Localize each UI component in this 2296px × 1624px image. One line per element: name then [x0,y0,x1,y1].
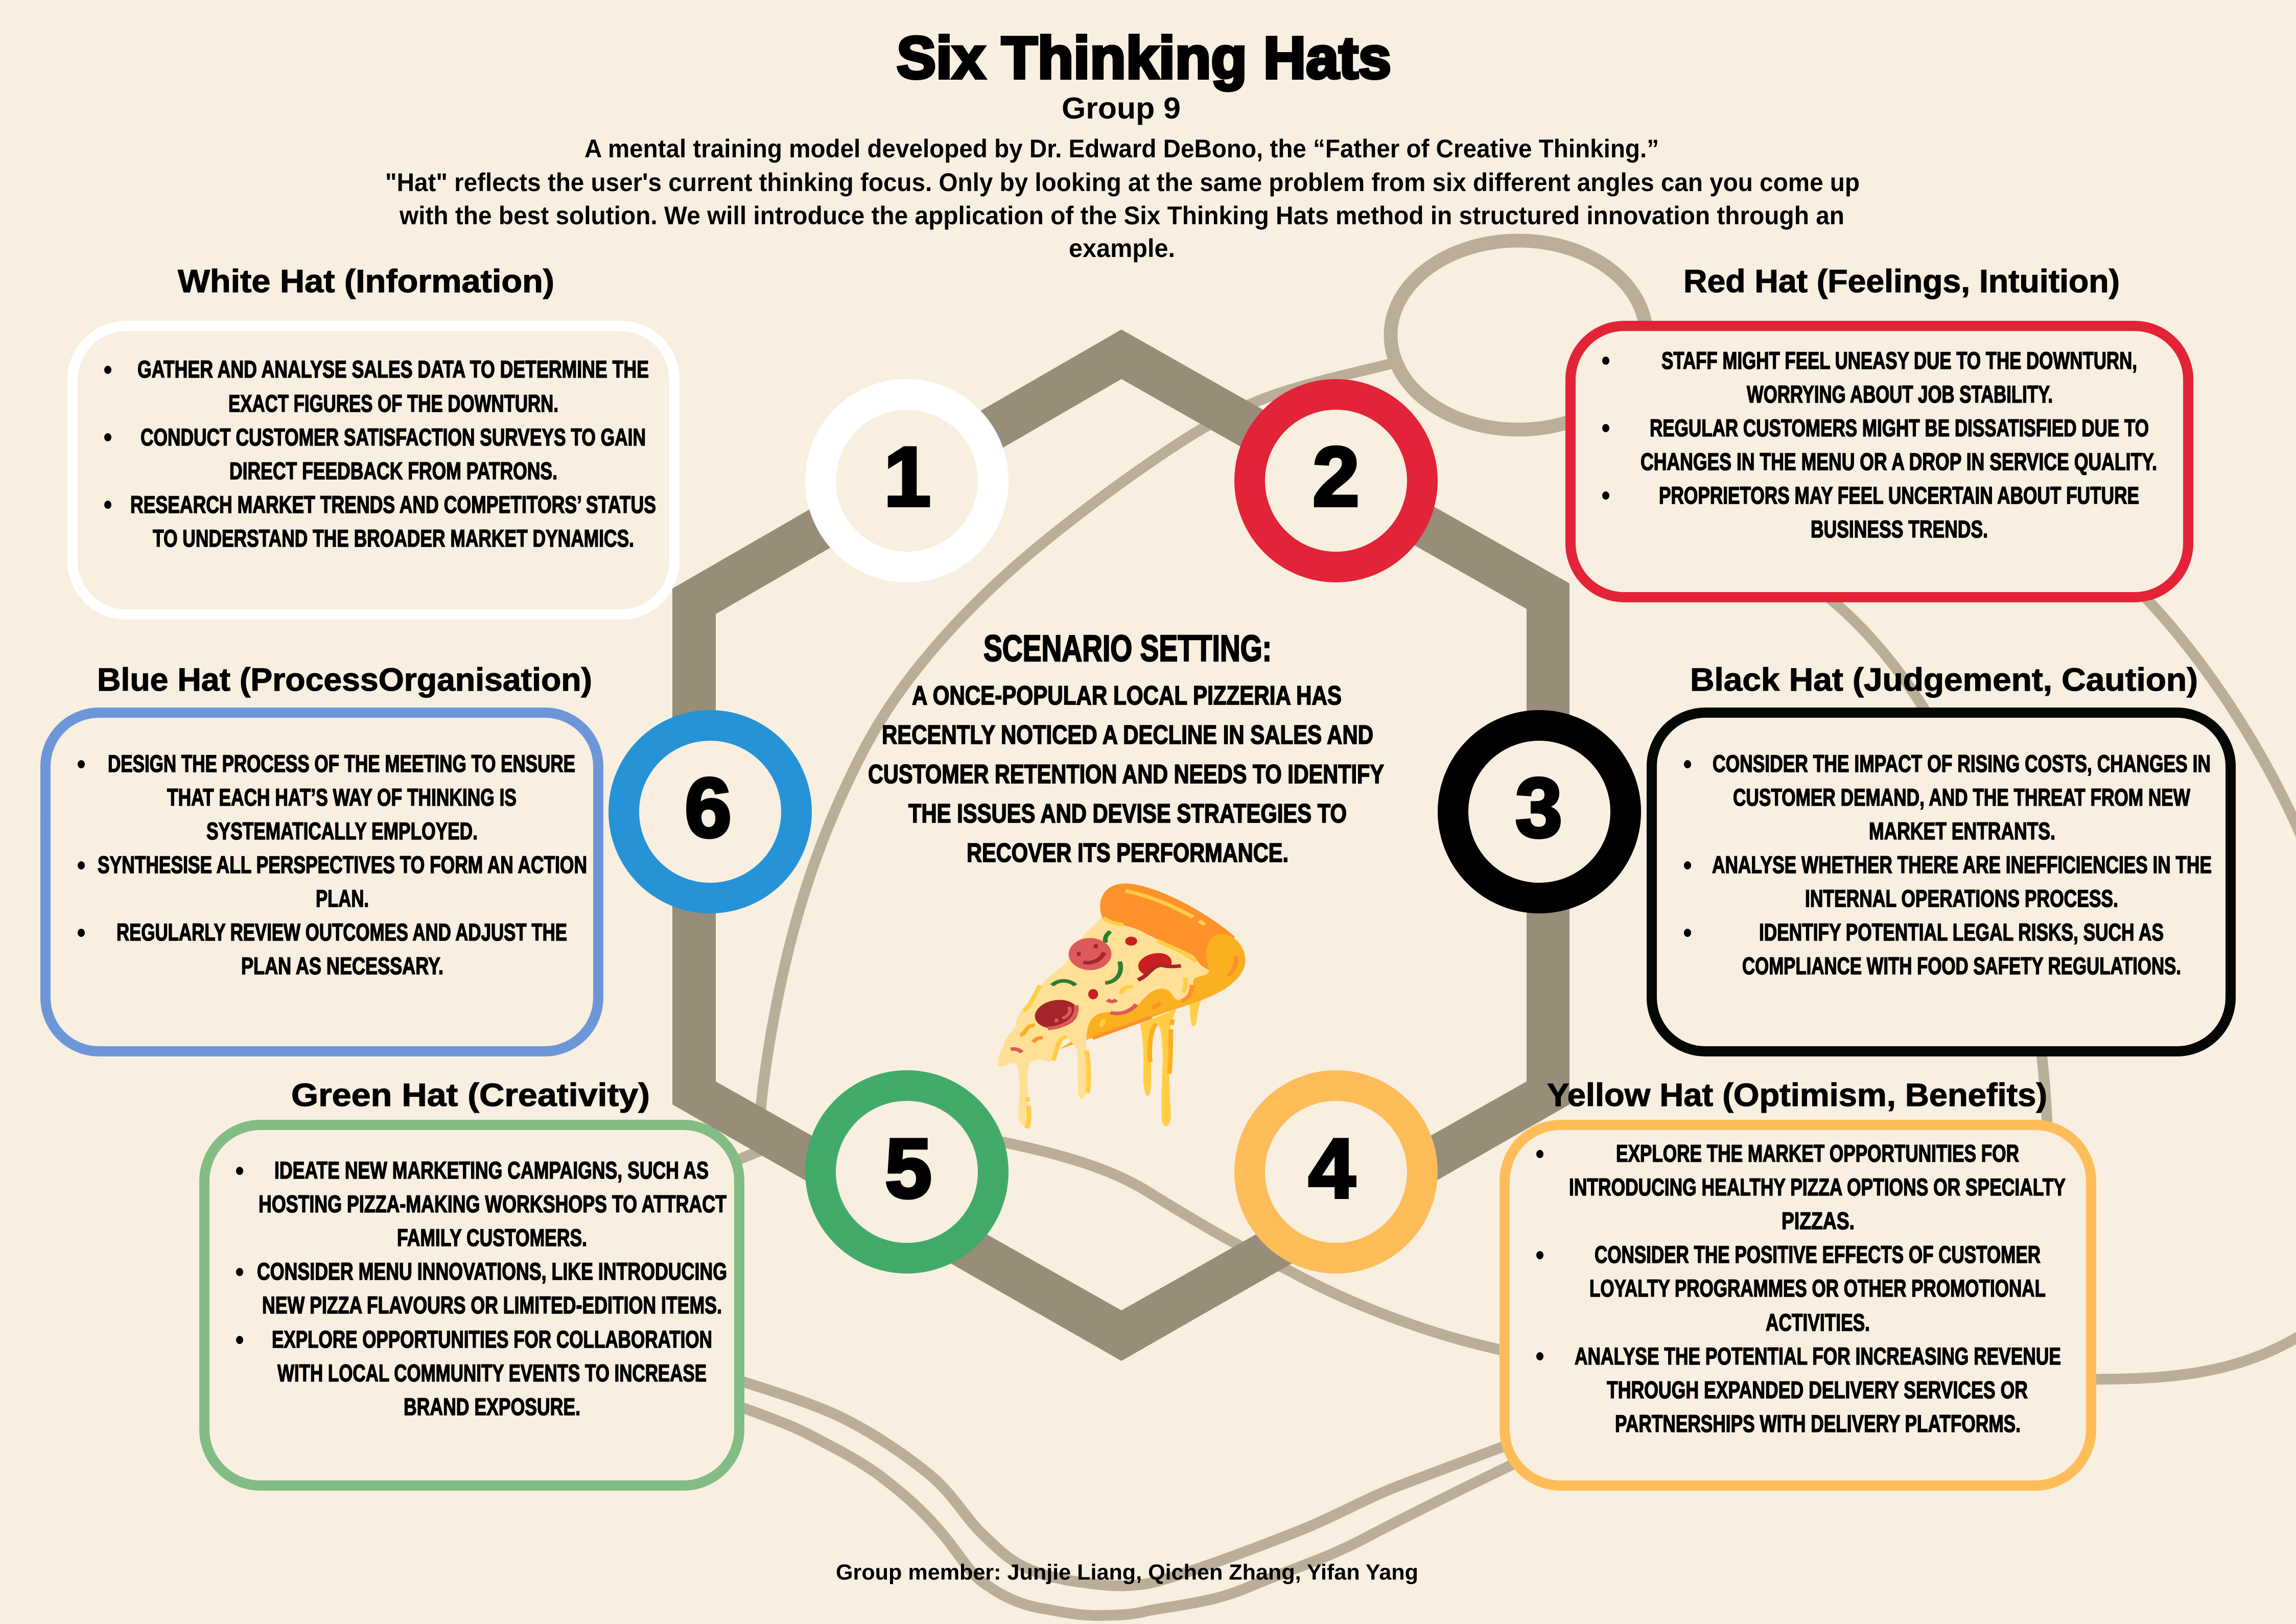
text: blue hat points: REGULARLY REVIEW OUTCOMES AND ADJUST THE [116,919,567,946]
text: yellow hat points: PIZZAS. [1782,1207,1855,1234]
number ring 1 [821,394,993,567]
text: blue hat points: SYSTEMATICALLY EMPLOYED. [206,817,478,844]
panel: yellow hat [1505,1077,2091,1486]
number ring 4 [1250,1086,1422,1258]
intro text: "Hat" reflects the user's current thinking focus. Only by looking at the same problem from six different angles can you come up [385,168,1860,197]
text: black hat points: IDENTIFY POTENTIAL LEGAL RISKS, SUCH AS [1759,919,2164,946]
text: blue hat points: SYNTHESISE ALL PERSPECTIVES TO FORM AN ACTION [98,851,587,878]
scenario text block: SCENARIO SETTING: [983,628,1272,669]
text: white hat points: CONDUCT CUSTOMER SATISFACTION SURVEYS TO GAIN [140,423,646,451]
text: black hat points: INTERNAL OPERATIONS PROCESS. [1805,885,2118,912]
heading: blue hat: Blue Hat (ProcessOrganisation) [97,662,592,698]
text: blue hat points: DESIGN THE PROCESS OF THE MEETING TO ENSURE [108,750,575,777]
text: blue hat points: THAT EACH HAT’S WAY OF THINKING IS [167,784,517,811]
heading: white hat: White Hat (Information) [178,264,554,299]
number ring 2 [1250,394,1422,567]
intro text: example. [1069,234,1175,263]
text: green hat points: EXPLORE OPPORTUNITIES FOR COLLABORATION [272,1326,712,1353]
text: green hat points: NEW PIZZA FLAVOURS OR LIMITED-EDITION ITEMS. [262,1291,722,1319]
intro text: A mental training model developed by Dr. Edward DeBono, the “Father of Creative Thinking.” [584,134,1659,163]
number ring 6: 6 [685,761,732,855]
text: red hat points: WORRYING ABOUT JOB STABILITY. [1747,381,2053,408]
text: yellow hat points: INTRODUCING HEALTHY PIZZA OPTIONS OR SPECIALTY [1569,1173,2066,1201]
text: yellow hat points: ANALYSE THE POTENTIAL FOR INCREASING REVENUE [1575,1343,2061,1370]
text: green hat points: CONSIDER MENU INNOVATIONS, LIKE INTRODUCING [257,1258,727,1285]
number ring 2: 2 [1313,430,1360,524]
text: yellow hat points: CONSIDER THE POSITIVE EFFECTS OF CUSTOMER [1595,1241,2041,1268]
scenario text block [868,628,1384,868]
text: red hat points [1602,347,2157,543]
text: red hat points: BUSINESS TRENDS. [1811,515,1988,543]
number ring 1: 1 [884,430,931,524]
text: green hat points: HOSTING PIZZA-MAKING WORKSHOPS TO ATTRACT [259,1190,727,1217]
text: green hat points: IDEATE NEW MARKETING CAMPAIGNS, SUCH AS [274,1157,709,1184]
text: white hat points [104,356,656,552]
text: yellow hat points: PARTNERSHIPS WITH DELIVERY PLATFORMS. [1615,1410,2021,1437]
text: blue hat points: PLAN. [316,885,369,912]
text: blue hat points: PLAN AS NECESSARY. [241,952,443,979]
subtitle: group: Group 9 [1062,91,1181,125]
scenario text block: RECOVER ITS PERFORMANCE. [967,838,1288,868]
number ring 3 [1453,725,1626,898]
text: black hat points: MARKET ENTRANTS. [1869,817,2055,844]
hexagon frame [672,329,1569,1361]
panel: blue hat [45,662,598,1051]
text: green hat points: WITH LOCAL COMMUNITY EVENTS TO INCREASE [277,1359,707,1386]
text: white hat points: TO UNDERSTAND THE BROADER MARKET DYNAMICS. [153,525,634,552]
scenario text block: CUSTOMER RETENTION AND NEEDS TO IDENTIFY [868,760,1384,789]
panel: white hat [73,264,674,615]
text: green hat points: FAMILY CUSTOMERS. [397,1224,587,1251]
box: black hat [1652,713,2231,1051]
number ring 5: 5 [885,1121,932,1215]
intro text [385,134,1860,263]
text: white hat points: DIRECT FEEDBACK FROM PATRONS. [229,457,557,484]
text: blue hat points [78,750,587,979]
panel: black hat [1652,662,2231,1051]
footer: group members: Group member: Junjie Liang, Qichen Zhang, Yifan Yang [836,1560,1418,1585]
box: blue hat [45,713,598,1051]
text: black hat points [1684,750,2212,979]
box: yellow hat [1505,1125,2091,1486]
panel: green hat [204,1077,739,1486]
text: green hat points [236,1157,727,1420]
box: white hat [73,326,674,615]
number ring 6 [624,725,796,898]
scenario text block: RECENTLY NOTICED A DECLINE IN SALES AND [882,720,1373,750]
scenario text block: A ONCE-POPULAR LOCAL PIZZERIA HAS [912,681,1342,711]
text: green hat points: BRAND EXPOSURE. [404,1393,580,1420]
heading: black hat: Black Hat (Judgement, Caution) [1690,662,2198,698]
text: red hat points: STAFF MIGHT FEEL UNEASY DUE TO THE DOWNTURN, [1661,347,2137,374]
text: white hat points: EXACT FIGURES OF THE DOWNTURN. [228,390,558,417]
heading: green hat: Green Hat (Creativity) [291,1077,650,1113]
icon: pizza slice [998,883,1246,1128]
text: white hat points: RESEARCH MARKET TRENDS AND COMPETITORS’ STATUS [130,491,656,518]
heading: yellow hat: Yellow Hat (Optimism, Benefits) [1547,1077,2047,1113]
scenario text block: THE ISSUES AND DEVISE STRATEGIES TO [908,799,1347,829]
number ring 3: 3 [1515,761,1562,855]
text: yellow hat points: THROUGH EXPANDED DELIVERY SERVICES OR [1607,1376,2028,1403]
text: white hat points: GATHER AND ANALYSE SALES DATA TO DETERMINE THE [137,356,649,383]
intro text: with the best solution. We will introduce the application of the Six Thinking Hats method in structured innovation through an [399,201,1844,230]
title: Six Thinking Hats [897,25,1391,91]
text: yellow hat points: EXPLORE THE MARKET OPPORTUNITIES FOR [1616,1140,2019,1167]
heading: red hat: Red Hat (Feelings, Intuition) [1683,264,2120,299]
text: yellow hat points: LOYALTY PROGRAMMES OR OTHER PROMOTIONAL [1589,1275,2046,1302]
number ring 5 [821,1086,993,1258]
text: red hat points: PROPRIETORS MAY FEEL UNCERTAIN ABOUT FUTURE [1659,482,2139,509]
box: red hat [1571,326,2188,597]
box: green hat [204,1125,739,1486]
text: yellow hat points [1536,1140,2066,1437]
panel: red hat [1571,264,2188,597]
number ring 4: 4 [1308,1121,1355,1215]
decorative looping line [736,241,2296,1615]
text: yellow hat points: ACTIVITIES. [1766,1309,1870,1336]
